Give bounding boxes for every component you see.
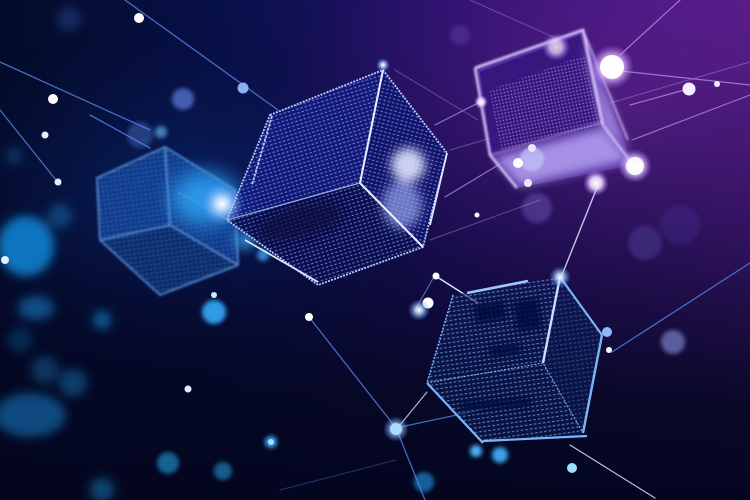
cube: blurred left block bbox=[97, 147, 257, 295]
cube: top right purple block bbox=[475, 30, 633, 188]
cube: top centre block bbox=[227, 70, 447, 285]
bokeh: soft mid and right lights bbox=[127, 25, 700, 492]
dark gaps in circuit pattern bbox=[460, 298, 542, 410]
bokeh: blurred left blue lights bbox=[0, 7, 114, 500]
dark patch on underside bbox=[251, 194, 349, 250]
glow in right face bbox=[382, 148, 425, 229]
cube: lower right block bbox=[427, 277, 602, 443]
